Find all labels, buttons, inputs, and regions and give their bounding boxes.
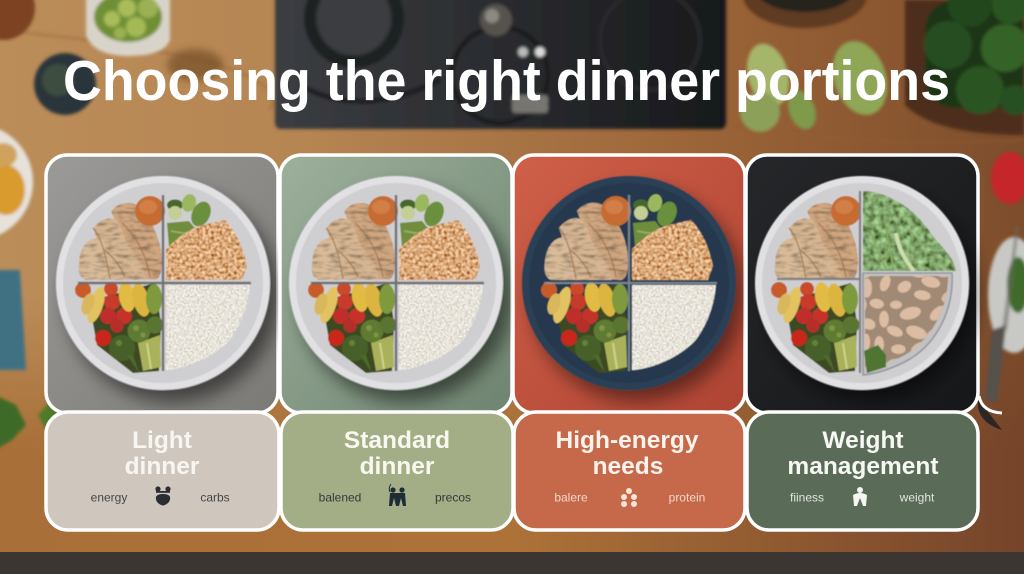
panel: high-energy plate [513,155,745,413]
icon: two figures [389,484,406,506]
tag: fiiness: fiiness [790,490,824,504]
card heading: needs [593,453,663,480]
tag: weight: weight [899,490,935,504]
tag: carbs: carbs [200,490,230,504]
panel: standard dinner plate [280,155,512,413]
title: Choosing the right dinner portions [63,49,950,113]
tag: protein: protein [669,490,705,504]
stove [275,0,726,129]
card heading: Light [132,427,192,454]
panel: weight management plate [746,155,1002,430]
card: weight management [747,412,978,530]
plate: greens and beans [755,176,977,401]
card: standard dinner [281,412,513,530]
plate: standard portions on sage [289,176,512,402]
panel: light dinner plate [46,155,279,413]
card: high-energy needs [514,412,745,530]
tag: energy: energy [91,490,127,504]
card heading: dinner [360,453,435,480]
card heading: High-energy [556,427,698,454]
card heading: dinner [125,453,200,480]
icon: cluster of dots [621,488,637,507]
tag: balere: balere [554,490,588,504]
plate: standard portions on white [56,176,279,402]
card heading: Weight [822,427,904,454]
background props: left side [0,0,223,450]
icon: person figure [853,487,867,506]
card: light dinner [46,412,279,530]
background props: right side [740,0,1024,402]
plate: navy plate with portions [522,176,744,401]
tag: balened: balened [319,490,361,504]
card heading: Standard [344,427,450,454]
tag: precos: precos [435,490,471,504]
card heading: management [787,453,939,480]
icon: heart with dots [155,486,171,506]
